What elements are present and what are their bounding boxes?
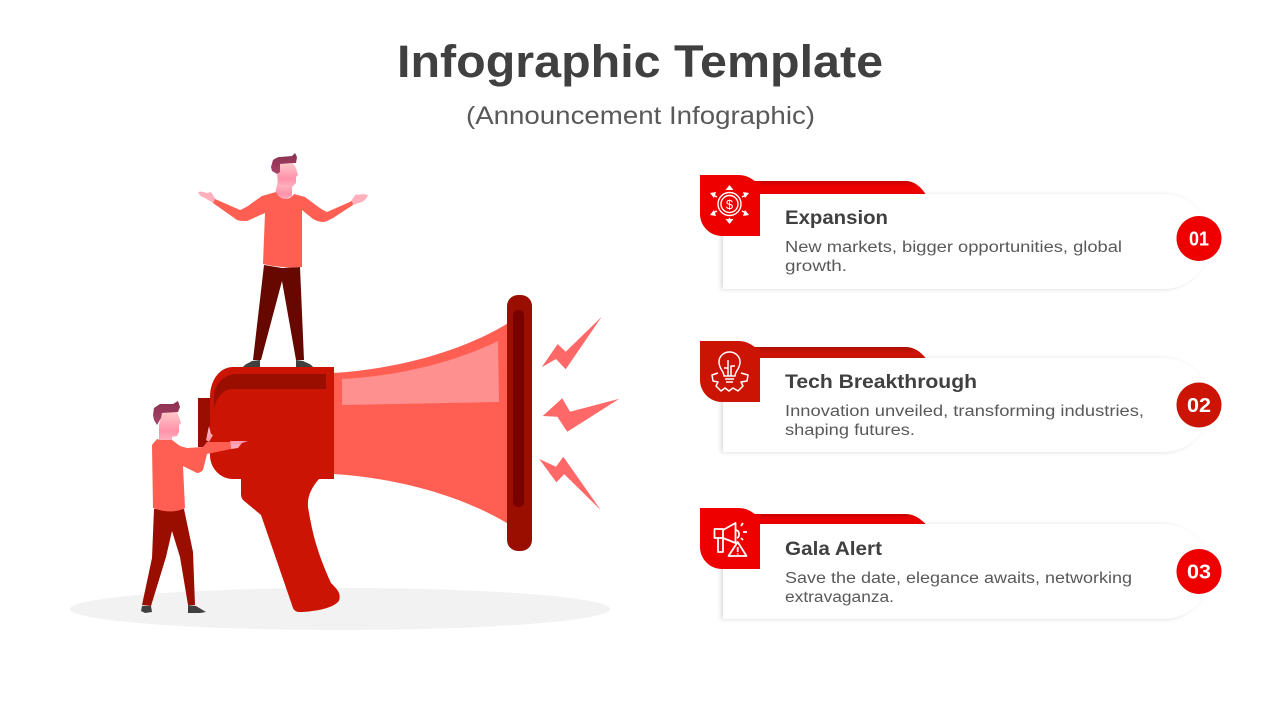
number badge: 01 (1189, 228, 1209, 250)
megaphone horn (333, 295, 532, 551)
icon: megaphone with warning (714, 523, 747, 556)
number badge (1176, 549, 1222, 594)
megaphone body and handle (198, 367, 340, 612)
white panel (723, 194, 1210, 289)
face (277, 163, 298, 187)
card 1: Expansion (700, 175, 1222, 289)
card 2: Tech Breakthrough (700, 341, 1222, 452)
red tab (745, 514, 926, 541)
description: growth. (785, 258, 847, 275)
description: shaping futures. (785, 422, 915, 439)
hair (271, 153, 297, 174)
number badge (1176, 382, 1222, 428)
sound bolts (539, 317, 619, 510)
heading: Tech Breakthrough (785, 371, 977, 393)
hands (206, 426, 248, 449)
number badge: 02 (1187, 395, 1211, 417)
number badge (1176, 216, 1222, 261)
ground shadow (70, 588, 610, 630)
sweater (213, 192, 353, 267)
red tab (745, 347, 926, 375)
hair (153, 401, 180, 425)
description (785, 570, 1132, 606)
heading: Gala Alert (785, 538, 883, 560)
icon tile (700, 508, 760, 569)
shoes (141, 605, 206, 613)
icon tile (700, 341, 760, 402)
description: extravaganza. (785, 589, 894, 606)
description (785, 239, 1122, 275)
subtitle: (Announcement Infographic) (466, 102, 815, 130)
description (785, 403, 1144, 439)
white panel (723, 358, 1210, 452)
icon tile (700, 175, 760, 236)
card 3: Gala Alert (700, 508, 1222, 619)
sweater (152, 439, 231, 511)
white panel (723, 524, 1210, 619)
person pointing at megaphone (141, 401, 248, 613)
illustration: megaphone with two people (70, 153, 619, 630)
title: Infographic Template (397, 36, 883, 87)
trousers (253, 265, 304, 360)
neck (275, 180, 292, 201)
description: Innovation unveiled, transforming industries, (785, 403, 1144, 420)
shoes (243, 360, 313, 367)
neck and face (159, 412, 181, 441)
icon: money expansion: $ (726, 197, 734, 212)
heading: Expansion (785, 207, 888, 229)
number badge: 03 (1187, 562, 1211, 584)
icon: money expansion (710, 185, 749, 224)
red tab (745, 181, 926, 210)
description: New markets, bigger opportunities, global (785, 239, 1122, 256)
trousers (142, 509, 195, 606)
icon: light bulb and gear (712, 352, 748, 391)
hands (198, 192, 368, 205)
description: Save the date, elegance awaits, networking (785, 570, 1132, 587)
person standing on megaphone (198, 153, 368, 367)
